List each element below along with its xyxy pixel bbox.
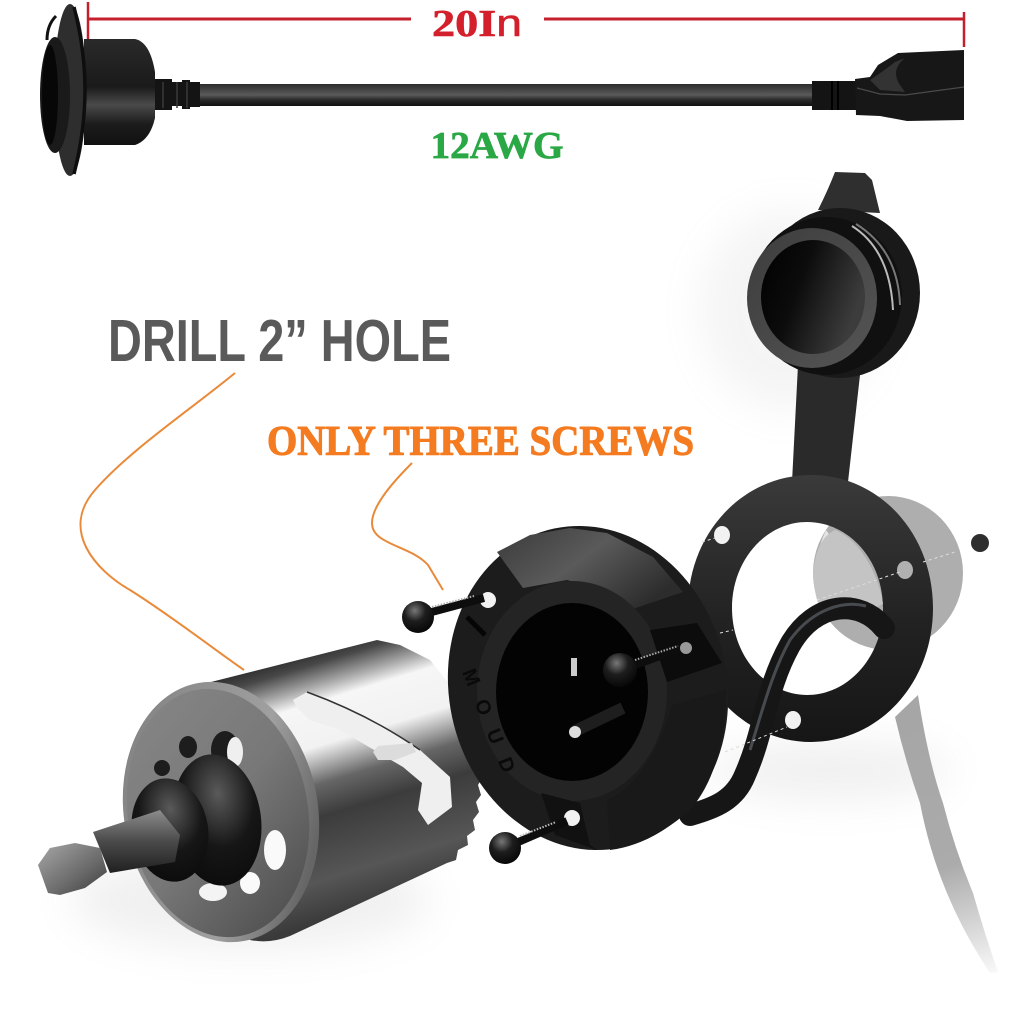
socket pins (575, 708, 623, 731)
end face (108, 674, 328, 952)
cap and lanyard gasket (688, 172, 933, 742)
cap front ring (747, 228, 877, 368)
face holes (179, 736, 197, 758)
right recess (650, 623, 722, 682)
socket ring (477, 581, 667, 801)
hex shank (93, 810, 180, 873)
leader line: screws (372, 463, 443, 590)
saw cylinder (207, 640, 482, 941)
dimension line: 20In: 20I n (432, 3, 522, 45)
inlet front ring (40, 37, 70, 153)
cable assembly photo (40, 4, 964, 176)
female plug (855, 50, 964, 121)
bulge (124, 772, 216, 888)
wall-side gray disc (813, 496, 963, 650)
lower strap (792, 365, 860, 482)
disc seen through gasket (813, 530, 883, 620)
callout: only three screws: ONLY THREE SCREWS (267, 419, 694, 465)
cap opening (761, 240, 865, 354)
lower side panel (607, 690, 726, 850)
pilot pin (373, 743, 416, 760)
S-curved black cable (690, 604, 884, 815)
white power cord (895, 695, 998, 973)
mount holes (714, 526, 730, 544)
leader line: drill (81, 373, 244, 670)
hex tip (38, 843, 107, 895)
rim slot (467, 617, 485, 635)
center socket (496, 603, 648, 781)
end face rim (103, 666, 339, 958)
screw two (603, 642, 692, 687)
inlet flange (54, 4, 86, 176)
inlet body (84, 39, 155, 145)
upper strap tab (818, 172, 880, 213)
small hole dot (971, 534, 989, 552)
dimension line: 20In (88, 2, 964, 47)
cap threads (750, 217, 902, 375)
embossed brand: MOUD (457, 666, 519, 776)
heading: drill hole: DRILL 2” HOLE (108, 308, 451, 374)
base outer (418, 500, 758, 876)
label: 12AWG: 12AWG (430, 125, 564, 167)
screw three (489, 810, 580, 864)
strain relief right (812, 81, 856, 110)
top panel (497, 528, 683, 610)
cable (195, 84, 820, 106)
screw one (402, 592, 496, 633)
strain relief left (155, 79, 200, 110)
slot (293, 692, 452, 825)
gasket ring (688, 475, 933, 742)
hole saw (38, 640, 482, 958)
inlet mounting base (418, 500, 758, 876)
bottom tab (541, 793, 597, 850)
collar (164, 749, 270, 891)
cap rear disc (760, 208, 920, 378)
screws (402, 592, 692, 864)
